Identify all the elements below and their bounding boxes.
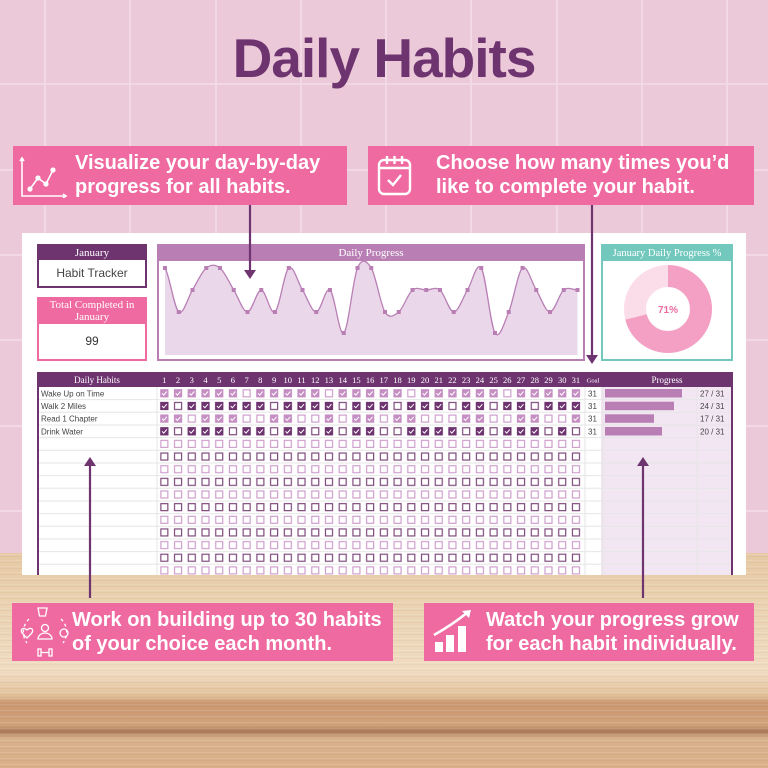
sheet (22, 233, 746, 575)
goal and progress values: 27 / 31 (700, 389, 725, 398)
table header: 25 (489, 375, 498, 385)
table header: 26 (503, 375, 512, 385)
callout: watch progress: Watch your progress grow (486, 609, 739, 631)
goal and progress values: 24 / 31 (700, 402, 725, 411)
table header: 21 (434, 375, 443, 385)
callout: work on building (12, 603, 393, 661)
table header: 31 (572, 375, 580, 385)
table header: 12 (311, 375, 319, 385)
table header: 8 (258, 375, 262, 385)
table header (37, 372, 733, 387)
donut chart (624, 265, 712, 353)
table header: 4 (203, 375, 208, 385)
table header: 9 (272, 375, 276, 385)
callout: watch progress (424, 603, 754, 661)
callout: choose: like to complete your habit. (436, 176, 695, 198)
habit names: Read 1 Chapter (41, 415, 98, 424)
progress bars (605, 389, 682, 436)
goal and progress values: 31 (588, 402, 597, 411)
table header: 27 (517, 375, 525, 385)
arrow: to chart (244, 205, 256, 279)
goal and progress values: 31 (588, 389, 597, 398)
goal and progress values: 31 (588, 415, 597, 424)
table header: 24 (476, 375, 485, 385)
table header: Daily Habits (74, 375, 120, 385)
checkmarks (160, 389, 580, 397)
arrow: to habit names (84, 457, 96, 598)
table header: Goal (587, 378, 600, 384)
arrow: to progress bars (637, 457, 649, 598)
table header: 1 (162, 375, 166, 385)
panel: donut (601, 244, 733, 361)
icon: habits circle (20, 607, 69, 657)
goal and progress values: 20 / 31 (700, 427, 725, 436)
panel: daily progress chart (157, 244, 585, 361)
title: Daily Habits (233, 27, 535, 89)
table header: 16 (366, 375, 374, 385)
table header: 10 (284, 375, 292, 385)
donut chart: 71% (658, 305, 678, 316)
habit names: Walk 2 Miles (41, 402, 86, 411)
goal and progress values (588, 389, 725, 436)
callout: visualize: Visualize your day-by-day (75, 152, 320, 174)
table header: 6 (231, 375, 235, 385)
table header: 2 (176, 375, 180, 385)
table header: 20 (421, 375, 429, 385)
table header: 22 (448, 375, 457, 385)
panel: January title box (37, 244, 147, 288)
icon: line chart (19, 156, 68, 198)
callout: choose (368, 146, 754, 205)
icon: growth bars (434, 610, 471, 652)
panel: total completed: 99 (85, 334, 99, 348)
table header: 15 (352, 375, 361, 385)
table header: 7 (244, 375, 249, 385)
table header: 28 (530, 375, 539, 385)
callout: watch progress: for each habit individually. (486, 633, 737, 655)
callout: visualize: progress for all habits. (75, 176, 291, 198)
callout: visualize (13, 146, 347, 205)
table header: Progress (652, 375, 683, 385)
table header: 14 (338, 375, 348, 385)
table header: 23 (462, 375, 470, 385)
panel: donut: January Daily Progress % (613, 248, 721, 259)
habit names (41, 389, 105, 436)
table header: 3 (190, 375, 194, 385)
table header: 30 (558, 375, 566, 385)
panel: total completed (37, 297, 147, 361)
panel: January title box: Habit Tracker (56, 266, 128, 280)
arrow: to goal (586, 205, 598, 364)
callout: work on building: Work on building up to 30 habits (72, 609, 382, 631)
table header: 18 (393, 375, 402, 385)
goal and progress values: 31 (588, 427, 597, 436)
table header: 17 (380, 375, 388, 385)
habit names: Drink Water (41, 427, 83, 436)
callout: choose: Choose how many times you’d (436, 152, 729, 174)
panel: total completed: Total Completed in January (50, 299, 134, 322)
panel: daily progress chart: Daily Progress (338, 247, 404, 259)
table header: 11 (297, 375, 306, 385)
panel: January title box: January (75, 247, 109, 259)
table header: 19 (407, 375, 416, 385)
habit names: Wake Up on Time (41, 389, 105, 398)
icon: calendar (378, 156, 412, 196)
table header: 5 (217, 375, 221, 385)
callout: work on building: of your choice each month. (72, 633, 332, 655)
goal and progress values: 17 / 31 (700, 415, 725, 424)
table header: 29 (544, 375, 553, 385)
table header: 13 (325, 375, 333, 385)
